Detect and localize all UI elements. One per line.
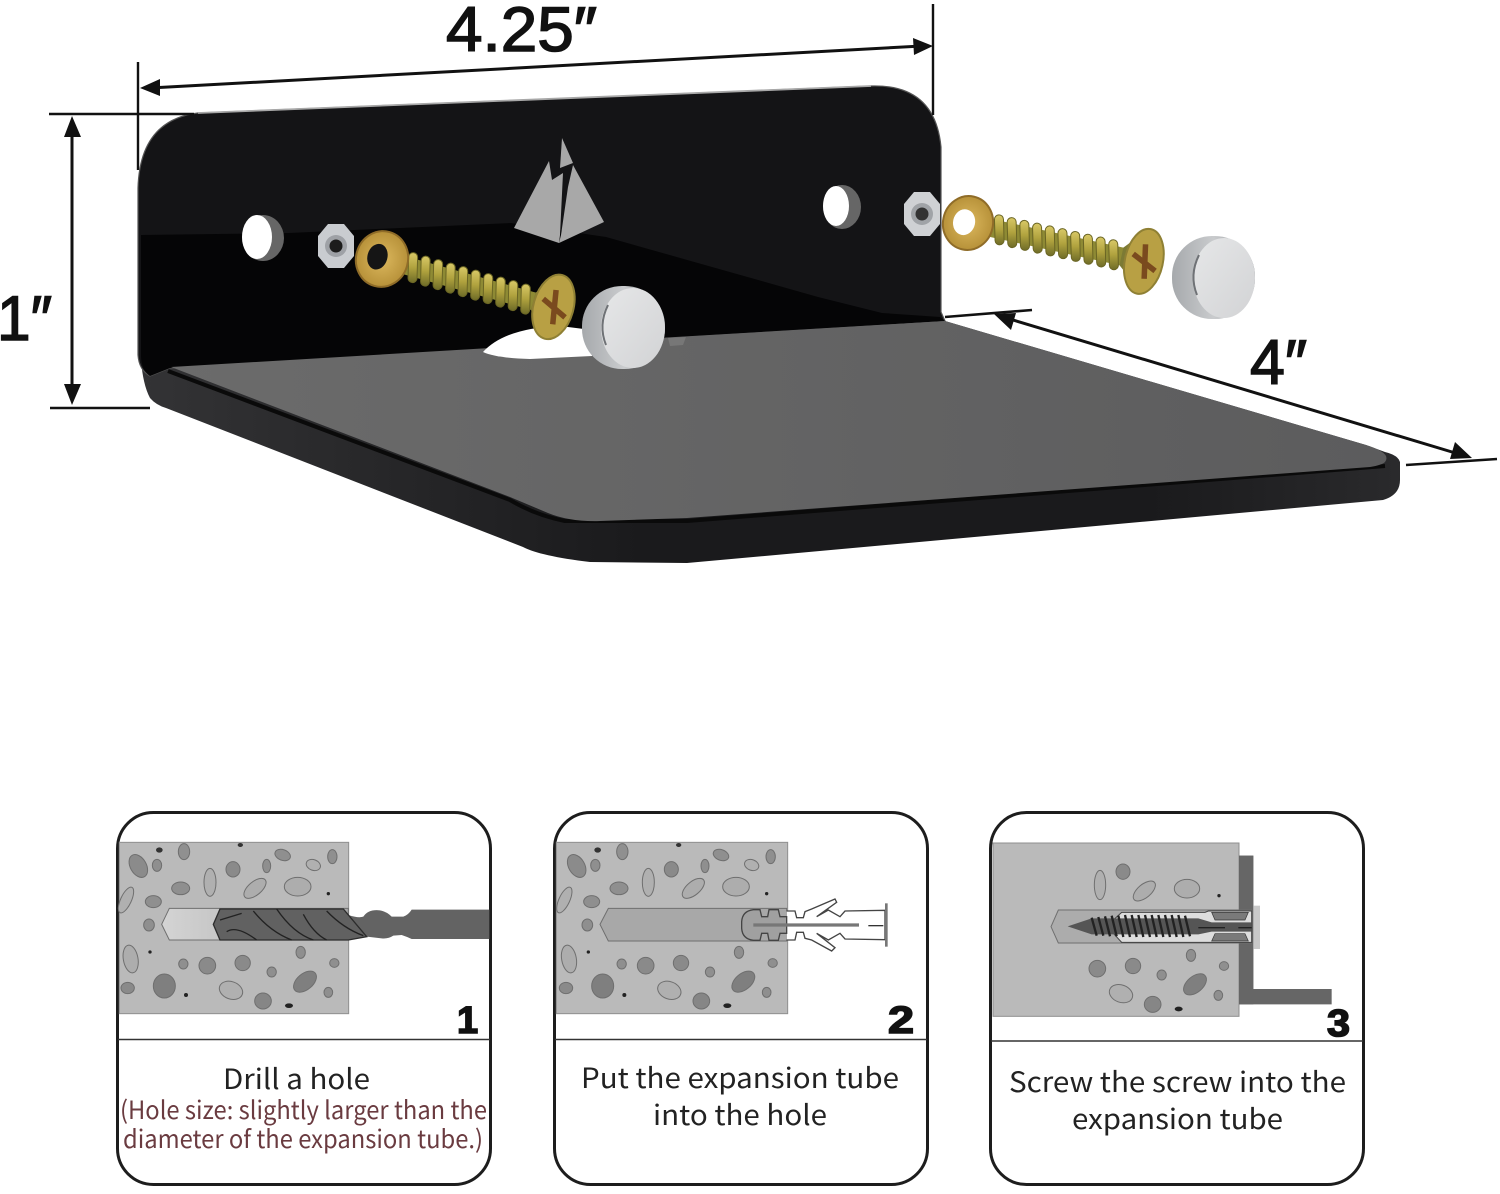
dimension: height 1	[0, 114, 194, 408]
nut right	[904, 192, 940, 236]
concrete block	[993, 843, 1253, 1016]
step text: Screw the screw into the	[1009, 1061, 1346, 1101]
dimension: depth 4	[945, 310, 1497, 465]
step number: 1	[457, 1000, 478, 1042]
expansion tube	[742, 899, 886, 951]
panel: step 3: expansion tube	[1072, 1098, 1283, 1138]
bracket product photo	[138, 86, 1400, 563]
screw left	[348, 220, 582, 344]
step number: 3	[1327, 1003, 1350, 1045]
icon: mountain logo	[514, 138, 604, 243]
cover cap right	[1172, 236, 1255, 319]
mounting hole right	[823, 185, 861, 229]
concrete block	[554, 842, 788, 1014]
top edge highlight	[198, 86, 871, 113]
divider	[555, 1038, 927, 1040]
step text: Drill a hole	[223, 1058, 370, 1098]
concrete block	[115, 842, 349, 1014]
panel: step 1: diameter of the expansion tube.)	[123, 1120, 483, 1156]
divider	[991, 1040, 1363, 1042]
L bracket	[1238, 856, 1332, 1004]
base opening	[483, 326, 592, 359]
panel: step 2: into the hole	[653, 1094, 827, 1134]
nut left	[318, 224, 354, 268]
dimension: depth 4: 4″	[1250, 328, 1307, 398]
back plate reflection	[141, 223, 945, 376]
mat shadow line	[168, 371, 1385, 521]
screw right	[937, 185, 1169, 298]
screw in tube	[1068, 906, 1260, 949]
panel: step 2	[554, 812, 928, 1184]
hole size note: (Hole size: slightly larger than the	[120, 1091, 487, 1127]
mounting hole left	[242, 215, 284, 261]
step text: Put the expansion tube	[581, 1057, 899, 1097]
dimension: width 4.25	[138, 0, 933, 170]
base plate edge	[141, 321, 1400, 563]
panel: step 1	[115, 812, 491, 1184]
drill bit	[213, 909, 489, 940]
cover cap left	[582, 286, 665, 369]
grey mat	[171, 321, 1386, 521]
divider	[118, 1038, 490, 1040]
step number: 2	[888, 1000, 914, 1042]
panel: step 3	[990, 812, 1364, 1184]
back plate	[138, 86, 945, 376]
